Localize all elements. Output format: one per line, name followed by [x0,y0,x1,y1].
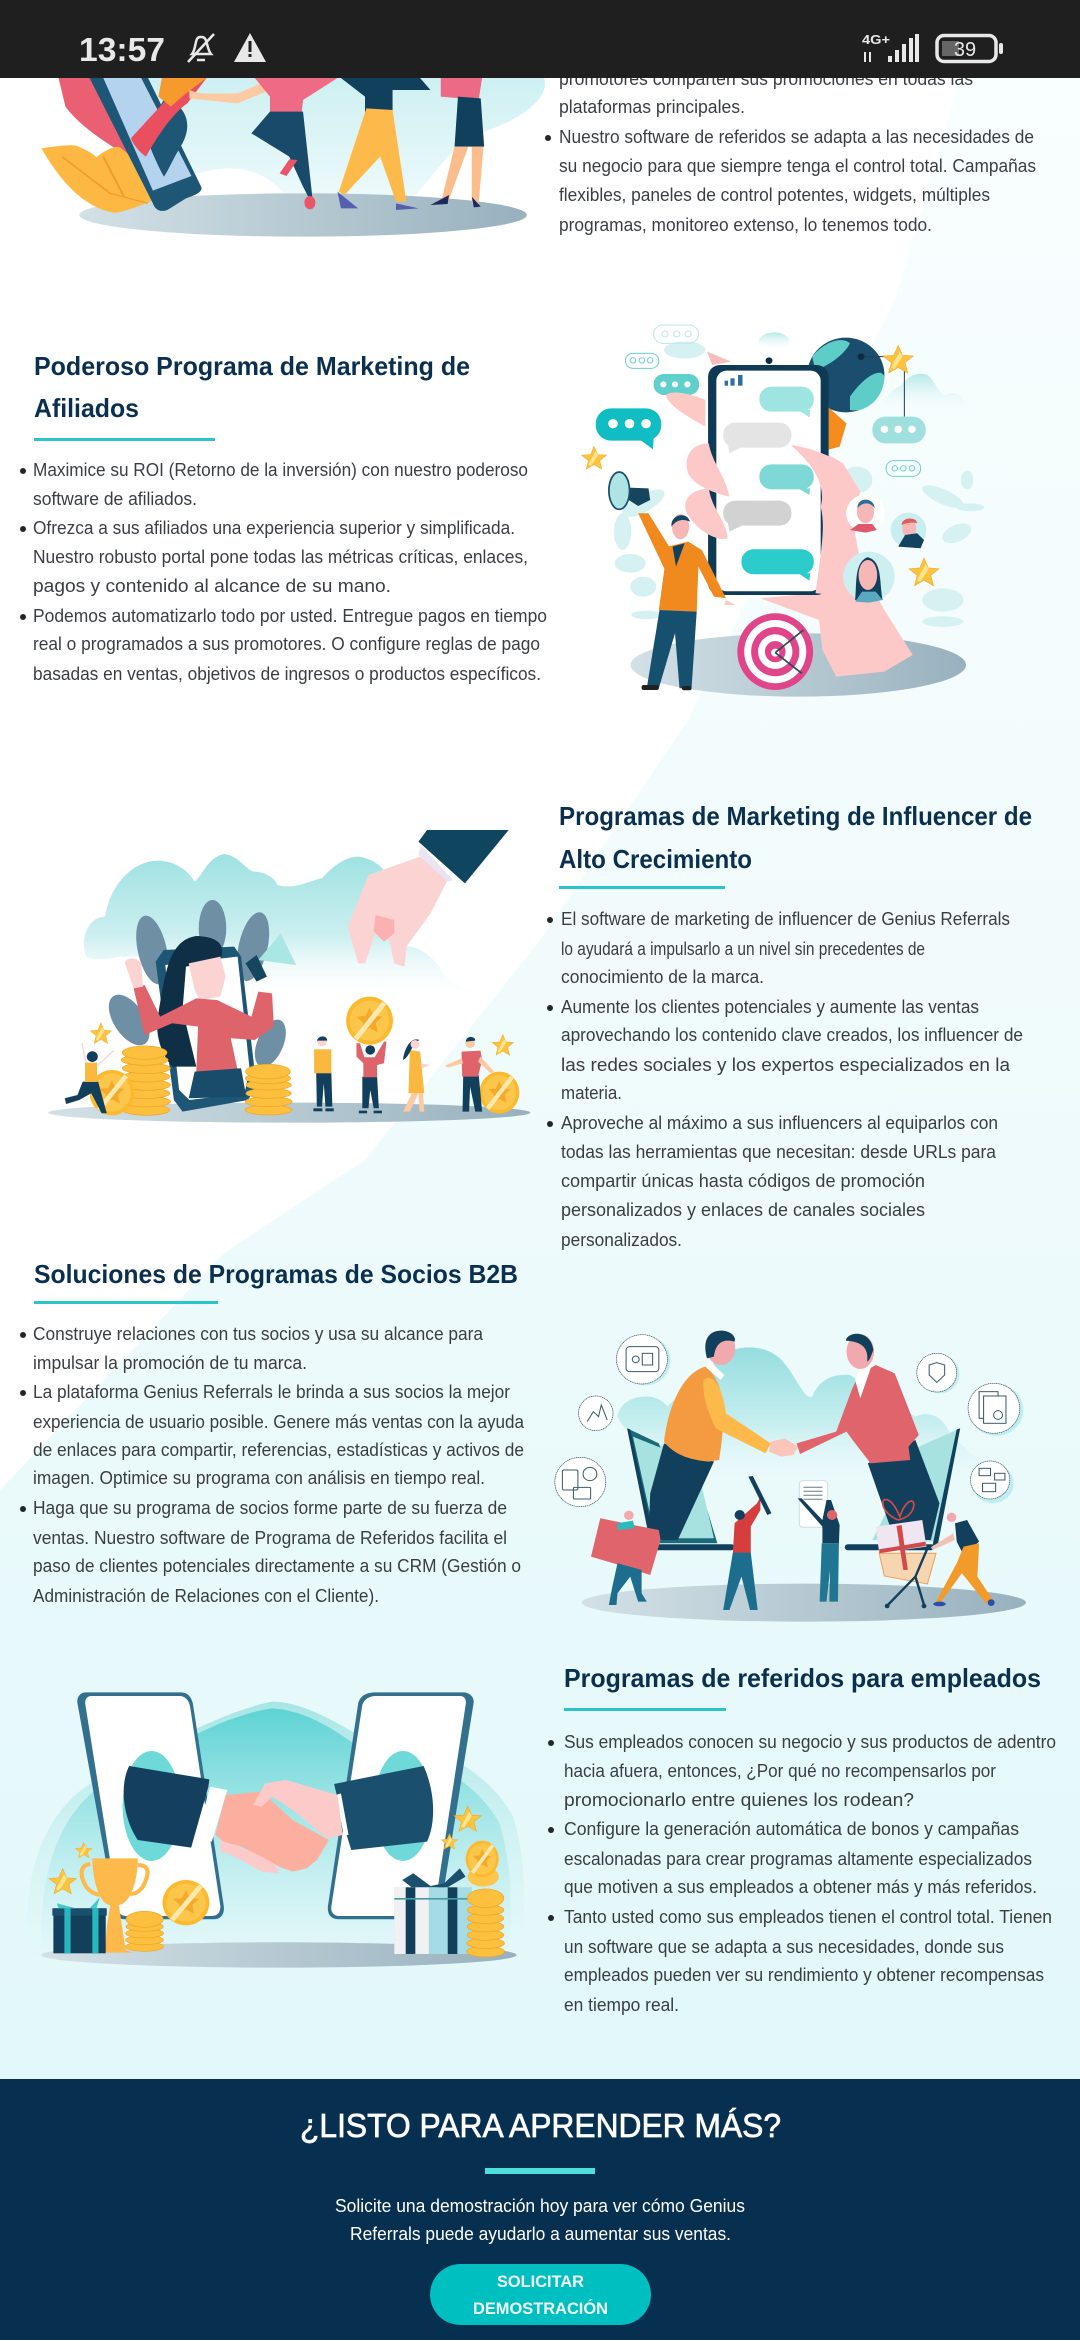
text block: referral software intro continued: plataformas principales. [559,97,745,117]
heading: influencer marketing: Alto Crecimiento [559,844,752,874]
heading: influencer marketing [559,801,1032,889]
button: request demo [430,2264,651,2325]
text block: employee referral bullets: promocionarlo entre quienes los rodean? [564,1790,914,1810]
text block: influencer marketing bullets: compartir únicas hasta códigos de promoción [561,1171,925,1191]
icon: network 4G signal: 4G+ [862,32,890,47]
icon: battery 39: 39 [954,39,976,61]
heading: employee referral programs: Programas de referidos para empleados [564,1663,1041,1693]
text block: influencer marketing bullets: El software de marketing de influencer de Genius Referrals [561,909,1010,929]
text block: affiliate marketing bullets: software de afiliados. [33,489,197,509]
text block: influencer marketing bullets: las redes sociales y los expertos especializados en la [561,1055,1011,1075]
text block: B2B partner bullets: impulsar la promoción de tu marca. [33,1353,307,1373]
icon: warning triangle [234,33,266,62]
button: request demo: DEMOSTRACIÓN [473,2299,608,2318]
illustration: influencer with megaphone and coins [48,830,530,1123]
heading: employee referral programs [564,1663,1041,1711]
text block: affiliate marketing bullets: Maximice su ROI (Retorno de la inversión) con nuestro poderoso [33,460,528,480]
text block: influencer marketing bullets: conocimiento de la marca. [561,967,764,987]
text block: referral software intro continued: programas, monitoreo extenso, lo tenemos todo. [559,215,932,235]
text block: employee referral bullets [548,1732,1056,2015]
icon: battery 39 [937,36,1003,62]
text block: affiliate marketing bullets: Nuestro robusto portal pone todas las métricas críticas, enlaces, [33,547,528,567]
footer description [335,2196,745,2244]
button: request demo: SOLICITAR [497,2272,584,2291]
text block: affiliate marketing bullets [20,460,547,684]
phone status bar [0,0,1080,78]
text block: employee referral bullets: Configure la generación automática de bonos y campañas [564,1819,1019,1839]
text block: B2B partner bullets: de enlaces para compartir, referencias, estadísticas y activos de [33,1440,524,1460]
text block: influencer marketing bullets: todas las herramientas que necesitan: desde URLs para [561,1142,997,1162]
text block: influencer marketing bullets: Aumente los clientes potenciales y aumente las ventas [561,997,979,1017]
heading: affiliate marketing: Poderoso Programa de Marketing de [34,351,470,381]
icon: network 4G signal [862,32,919,62]
text block: influencer marketing bullets: personalizados y enlaces de canales sociales [561,1200,925,1220]
text block: B2B partner bullets: La plataforma Genius Referrals le brinda a sus socios la mejor [33,1382,510,1402]
footer description: Referrals puede ayudarlo a aumentar sus ventas. [350,2224,731,2244]
text block: referral software intro continued: promotores comparten sus promociones en todas las [559,69,973,89]
text block: employee referral bullets: escalonadas para crear programas altamente especializados [564,1849,1032,1869]
text block: B2B partner bullets: ventas. Nuestro software de Programa de Referidos facilita el [33,1528,507,1548]
text block: influencer marketing bullets: personalizados. [561,1230,682,1250]
footer accent rule [485,2168,595,2174]
heading: B2B partner programs: Soluciones de Programas de Socios B2B [34,1259,518,1289]
text block: influencer marketing bullets: aprovechando los contenido clave creados, los influencer de [561,1025,1023,1045]
text block: affiliate marketing bullets: Ofrezca a sus afiliados una experiencia superior y simplificada. [33,518,515,538]
text block: employee referral bullets: Tanto usted como sus empleados tienen el control total. Tienen [564,1907,1052,1927]
text block: affiliate marketing bullets: basadas en ventas, objetivos de ingresos o productos específicos. [33,664,541,684]
text block: B2B partner bullets: paso de clientes potenciales directamente a su CRM (Gestión o [33,1556,521,1576]
icon: muted bell [188,34,214,62]
text block: referral software intro continued: Nuestro software de referidos se adapta a las necesidades de [559,127,1034,147]
illustration: phones shaking hands with trophies and gifts [27,1692,525,1968]
text block: referral software intro continued [545,69,1036,235]
text block: affiliate marketing bullets: pagos y contenido al alcance de su mano. [33,576,391,596]
footer description: Solicite una demostración hoy para ver cómo Genius [335,2196,745,2216]
illustration: hand holding phone with chat bubbles [582,325,984,697]
text block: employee referral bullets: que motiven a sus empleados a obtener más y más referidos. [564,1877,1037,1897]
text block: employee referral bullets: empleados pueden ver su rendimiento y obtener recompensas [564,1965,1044,1985]
heading: B2B partner programs [34,1259,518,1304]
text block: employee referral bullets: Sus empleados conocen su negocio y sus productos de adentro [564,1732,1056,1752]
text block: referral software intro continued: su negocio para que siempre tenga el control total. Campañas [559,156,1036,176]
heading: affiliate marketing [34,351,470,441]
text block: B2B partner bullets: Construye relaciones con tus socios y usa su alcance para [33,1324,484,1344]
footer heading: ¿LISTO PARA APRENDER MÁS? [300,2107,781,2144]
text block: affiliate marketing bullets: Podemos automatizarlo todo por usted. Entregue pagos en tiempo [33,606,547,626]
heading: influencer marketing: Programas de Marketing de Influencer de [559,801,1032,831]
text block: B2B partner bullets: imagen. Optimice su programa con análisis en tiempo real. [33,1468,485,1488]
text block: influencer marketing bullets: materia. [561,1083,622,1103]
text block: employee referral bullets: un software que se adapta a sus necesidades, donde sus [564,1937,1004,1957]
text block: influencer marketing bullets: lo ayudará a impulsarlo a un nivel sin precedentes de [561,939,925,959]
heading: affiliate marketing: Afiliados [34,393,139,423]
text block: affiliate marketing bullets: real o programados a sus promotores. O configure reglas de pago [33,634,540,654]
illustration: business handshake across laptops [555,1331,1026,1622]
illustration: people and phone [41,78,545,237]
text block: B2B partner bullets: experiencia de usuario posible. Genere más ventas con la ayuda [33,1412,525,1432]
footer call to action panel [0,2079,1080,2340]
text block: influencer marketing bullets: Aproveche al máximo a sus influencers al equiparlos con [561,1113,998,1133]
text block: referral software intro continued: flexibles, paneles de control potentes, widgets, múltiples [559,185,990,205]
text block: B2B partner bullets [20,1324,525,1606]
text block: B2B partner bullets: Administración de Relaciones con el Cliente). [33,1586,379,1606]
text block: employee referral bullets: en tiempo real. [564,1995,679,2015]
text block: influencer marketing bullets [547,909,1023,1250]
clock: 13:57 [79,31,165,68]
text block: B2B partner bullets: Haga que su programa de socios forme parte de su fuerza de [33,1498,507,1518]
text block: employee referral bullets: hacia afuera, entonces, ¿Por qué no recompensarlos por [564,1761,996,1781]
